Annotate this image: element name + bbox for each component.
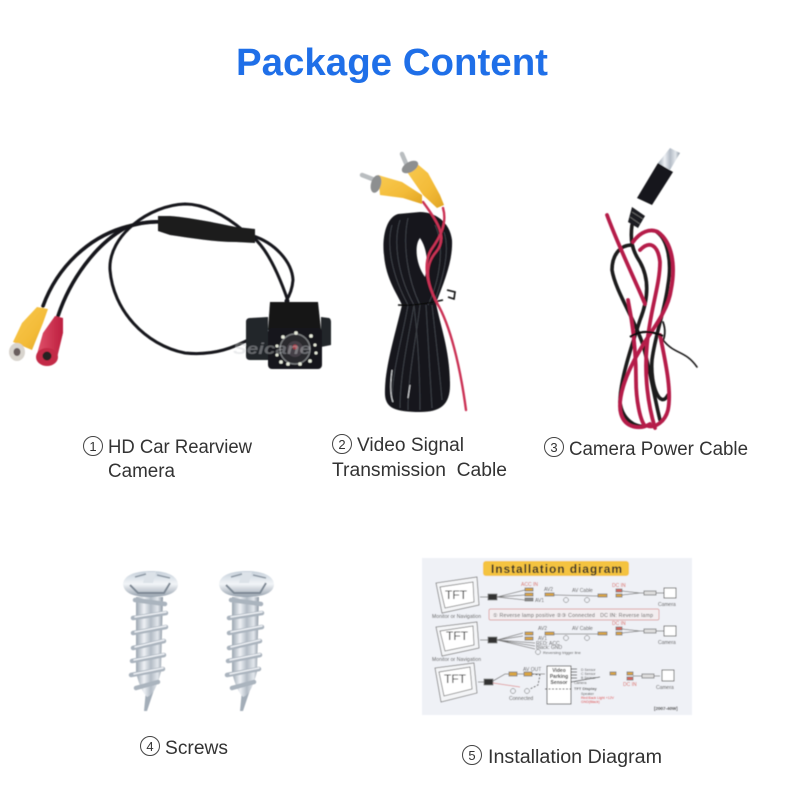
item 5 label: Installation Diagram: [488, 747, 662, 768]
wiring row 3 with parking sensor box: Connected: [509, 696, 533, 702]
wiring row 1 labels: AV Cable: [572, 588, 593, 594]
item 2: video signal cable photo: [362, 154, 466, 412]
yellow RCA connector: [9, 307, 48, 361]
wiring row 3 with parking sensor box: Red:Back Light +12V: [581, 696, 615, 700]
RCA plug left: [362, 174, 422, 204]
cable tie: [398, 290, 455, 305]
wiring row 1 labels: AV1: [535, 598, 544, 604]
wiring row 2 labels: AV2: [538, 626, 547, 632]
wiring row 2: [480, 626, 676, 649]
item 4: screw right: [219, 571, 274, 711]
wiring row 2 labels: AV Cable: [572, 626, 593, 632]
wiring row 1: [480, 588, 676, 601]
wiring row 2 labels: RED: ACC: [536, 641, 560, 647]
moulded cable junction: [158, 216, 255, 243]
black wire: [612, 225, 697, 426]
wiring row 3 with parking sensor box: D Sensor: [581, 668, 596, 672]
item 2 label: [332, 434, 507, 481]
monitor 1: Monitor or Navigation: [432, 614, 481, 620]
RCA plug right: [400, 154, 444, 208]
item 1: HD car rearview camera photo: [9, 204, 331, 369]
item 2 label: Video Signal: [357, 435, 464, 456]
coiled black cable: [383, 212, 452, 412]
wiring row 3 with parking sensor box: Camera: [574, 681, 587, 685]
wiring row 3 with parking sensor box: GND(Black): [581, 700, 600, 704]
item 2 label: 2: [338, 437, 346, 452]
wiring row 3 with parking sensor box: DC IN: [623, 682, 637, 688]
item 4 label: Screws: [165, 738, 228, 759]
item 1 label: [84, 436, 252, 482]
wiring row 2 labels: Camera: [658, 640, 676, 646]
wiring row 3 with parking sensor box: Parking: [550, 674, 568, 680]
diagram heading: Installation diagram: [491, 562, 622, 576]
red wire: [607, 215, 673, 428]
wiring row 3 with parking sensor box: Sensor: [551, 680, 568, 686]
wiring row 3 with parking sensor box: [2007-40W]: [654, 706, 678, 711]
wiring row 3 with parking sensor box: Video: [552, 668, 566, 674]
item 3 label: Camera Power Cable: [569, 439, 748, 460]
wiring row 1 labels: ACC IN: [521, 582, 538, 588]
monitor 2: TFT: [446, 629, 469, 643]
item 1 label: Camera: [108, 461, 175, 482]
item 5 label: 5: [468, 748, 476, 763]
wiring row 1 labels: [521, 582, 676, 608]
wiring row 1 labels: AV2: [544, 587, 553, 593]
item 5: installation diagram card: [422, 558, 692, 715]
wiring row 2 labels: Black: GND: [536, 645, 563, 651]
monitor 2: [432, 622, 481, 663]
wiring row 3 with parking sensor box: Camera: [656, 685, 674, 691]
camera body: [233, 302, 331, 369]
monitor 1: [432, 577, 481, 620]
legend box: [489, 609, 659, 620]
monitor 1: TFT: [445, 588, 468, 602]
wiring row 3 with parking sensor box: B Sensor: [581, 676, 596, 680]
wiring row 3 with parking sensor box: [478, 666, 678, 711]
item 1 label: HD Car Rearview: [108, 437, 252, 458]
title: Package Content: [236, 42, 548, 84]
item 3 label: 3: [550, 440, 558, 455]
item 4 label: [140, 736, 228, 759]
monitor 3: TFT: [444, 672, 467, 686]
item 3: camera power cable photo: [607, 148, 697, 428]
wiring row 2 labels: [536, 621, 676, 655]
wiring row 2 labels: DC IN: [612, 621, 626, 627]
wiring row 1 labels: Camera: [658, 602, 676, 608]
DC plug: [628, 148, 680, 228]
wiring row 3 with parking sensor box: C Sensor: [581, 672, 596, 676]
cables: [43, 204, 293, 354]
wire tie: [630, 332, 663, 337]
wiring row 3 with parking sensor box: TFT Display: [574, 686, 597, 691]
legend box: ① Reverse lamp positive ②③ Connected DC IN: Reverse lamp: [493, 613, 653, 619]
red DC connector: [36, 316, 63, 366]
item 1 label: 1: [89, 439, 97, 454]
monitor 3: [435, 663, 477, 702]
wiring row 3 with parking sensor box: Speaker: [581, 692, 595, 696]
red trigger wire: [423, 202, 466, 410]
wiring row 3 with parking sensor box: AV OUT: [523, 667, 541, 673]
wiring row 2 labels: AV1: [538, 636, 547, 642]
item 2 label: Transmission Cable: [332, 460, 507, 481]
monitor 2: Monitor or Navigation: [432, 657, 481, 663]
item 4: screw left: [123, 571, 178, 711]
item 4 label: 4: [146, 739, 154, 754]
camera body: Seicane: [233, 341, 311, 358]
wiring row 1 labels: DC IN: [612, 583, 626, 589]
wiring row 2 labels: Reversing trigger line: [543, 650, 582, 655]
